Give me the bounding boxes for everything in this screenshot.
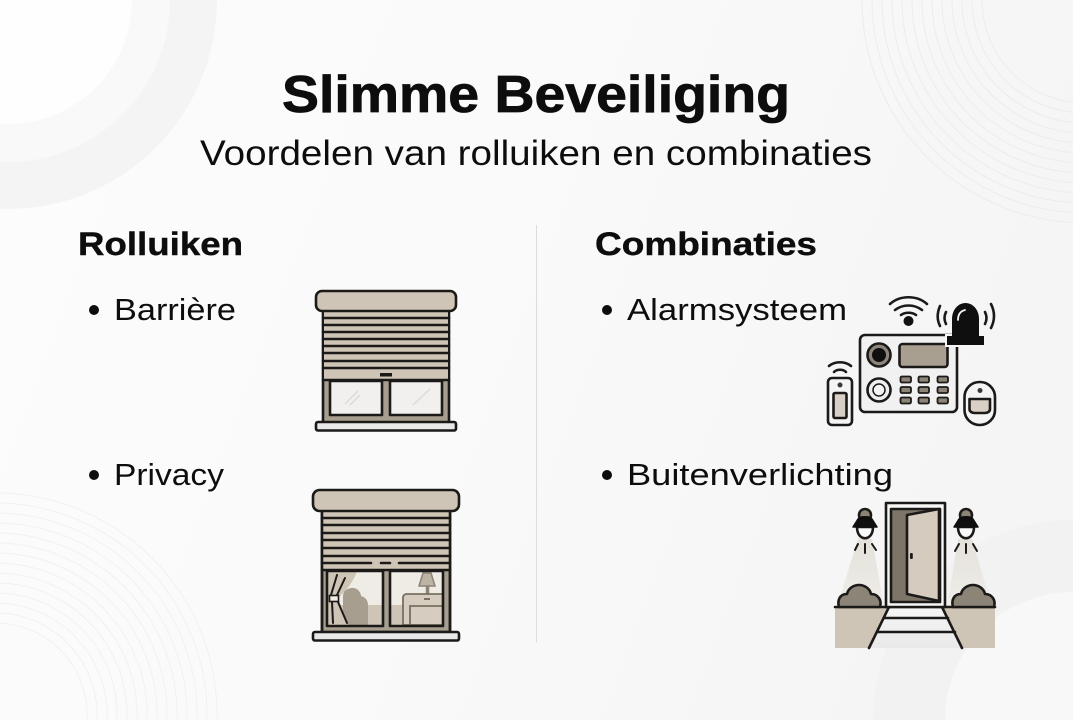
- panel: rolluiken: [78, 226, 459, 640]
- subtitle: Voordelen van rolluiken en combinaties: [200, 134, 872, 173]
- icon: remote sensor: [828, 362, 852, 425]
- list item: Alarmsysteem: Alarmsysteem: [627, 292, 847, 327]
- icon: right lamp: [954, 509, 978, 553]
- list item: Barrière: Barrière: [114, 292, 236, 327]
- icon: wifi signal: [890, 297, 927, 326]
- heading: Combinaties: Combinaties: [595, 226, 817, 262]
- divider: [536, 225, 538, 642]
- icon: left lamp: [853, 509, 877, 553]
- list item: Buitenverlichting: Buitenverlichting: [627, 457, 893, 492]
- panel: combinaties: [595, 226, 995, 648]
- icon: door with outdoor lighting: [835, 503, 995, 648]
- icon: motion sensor: [964, 382, 995, 425]
- title: Slimme Beveiliging: [282, 66, 790, 124]
- icon: privacy shutter window with interior: [313, 490, 459, 640]
- list item: Privacy: Privacy: [114, 457, 225, 492]
- icon: alarm system: [828, 297, 995, 425]
- icon: siren: [938, 303, 994, 347]
- heading: Rolluiken: Rolluiken: [78, 226, 243, 262]
- icon: closed roller shutter window: [316, 291, 456, 430]
